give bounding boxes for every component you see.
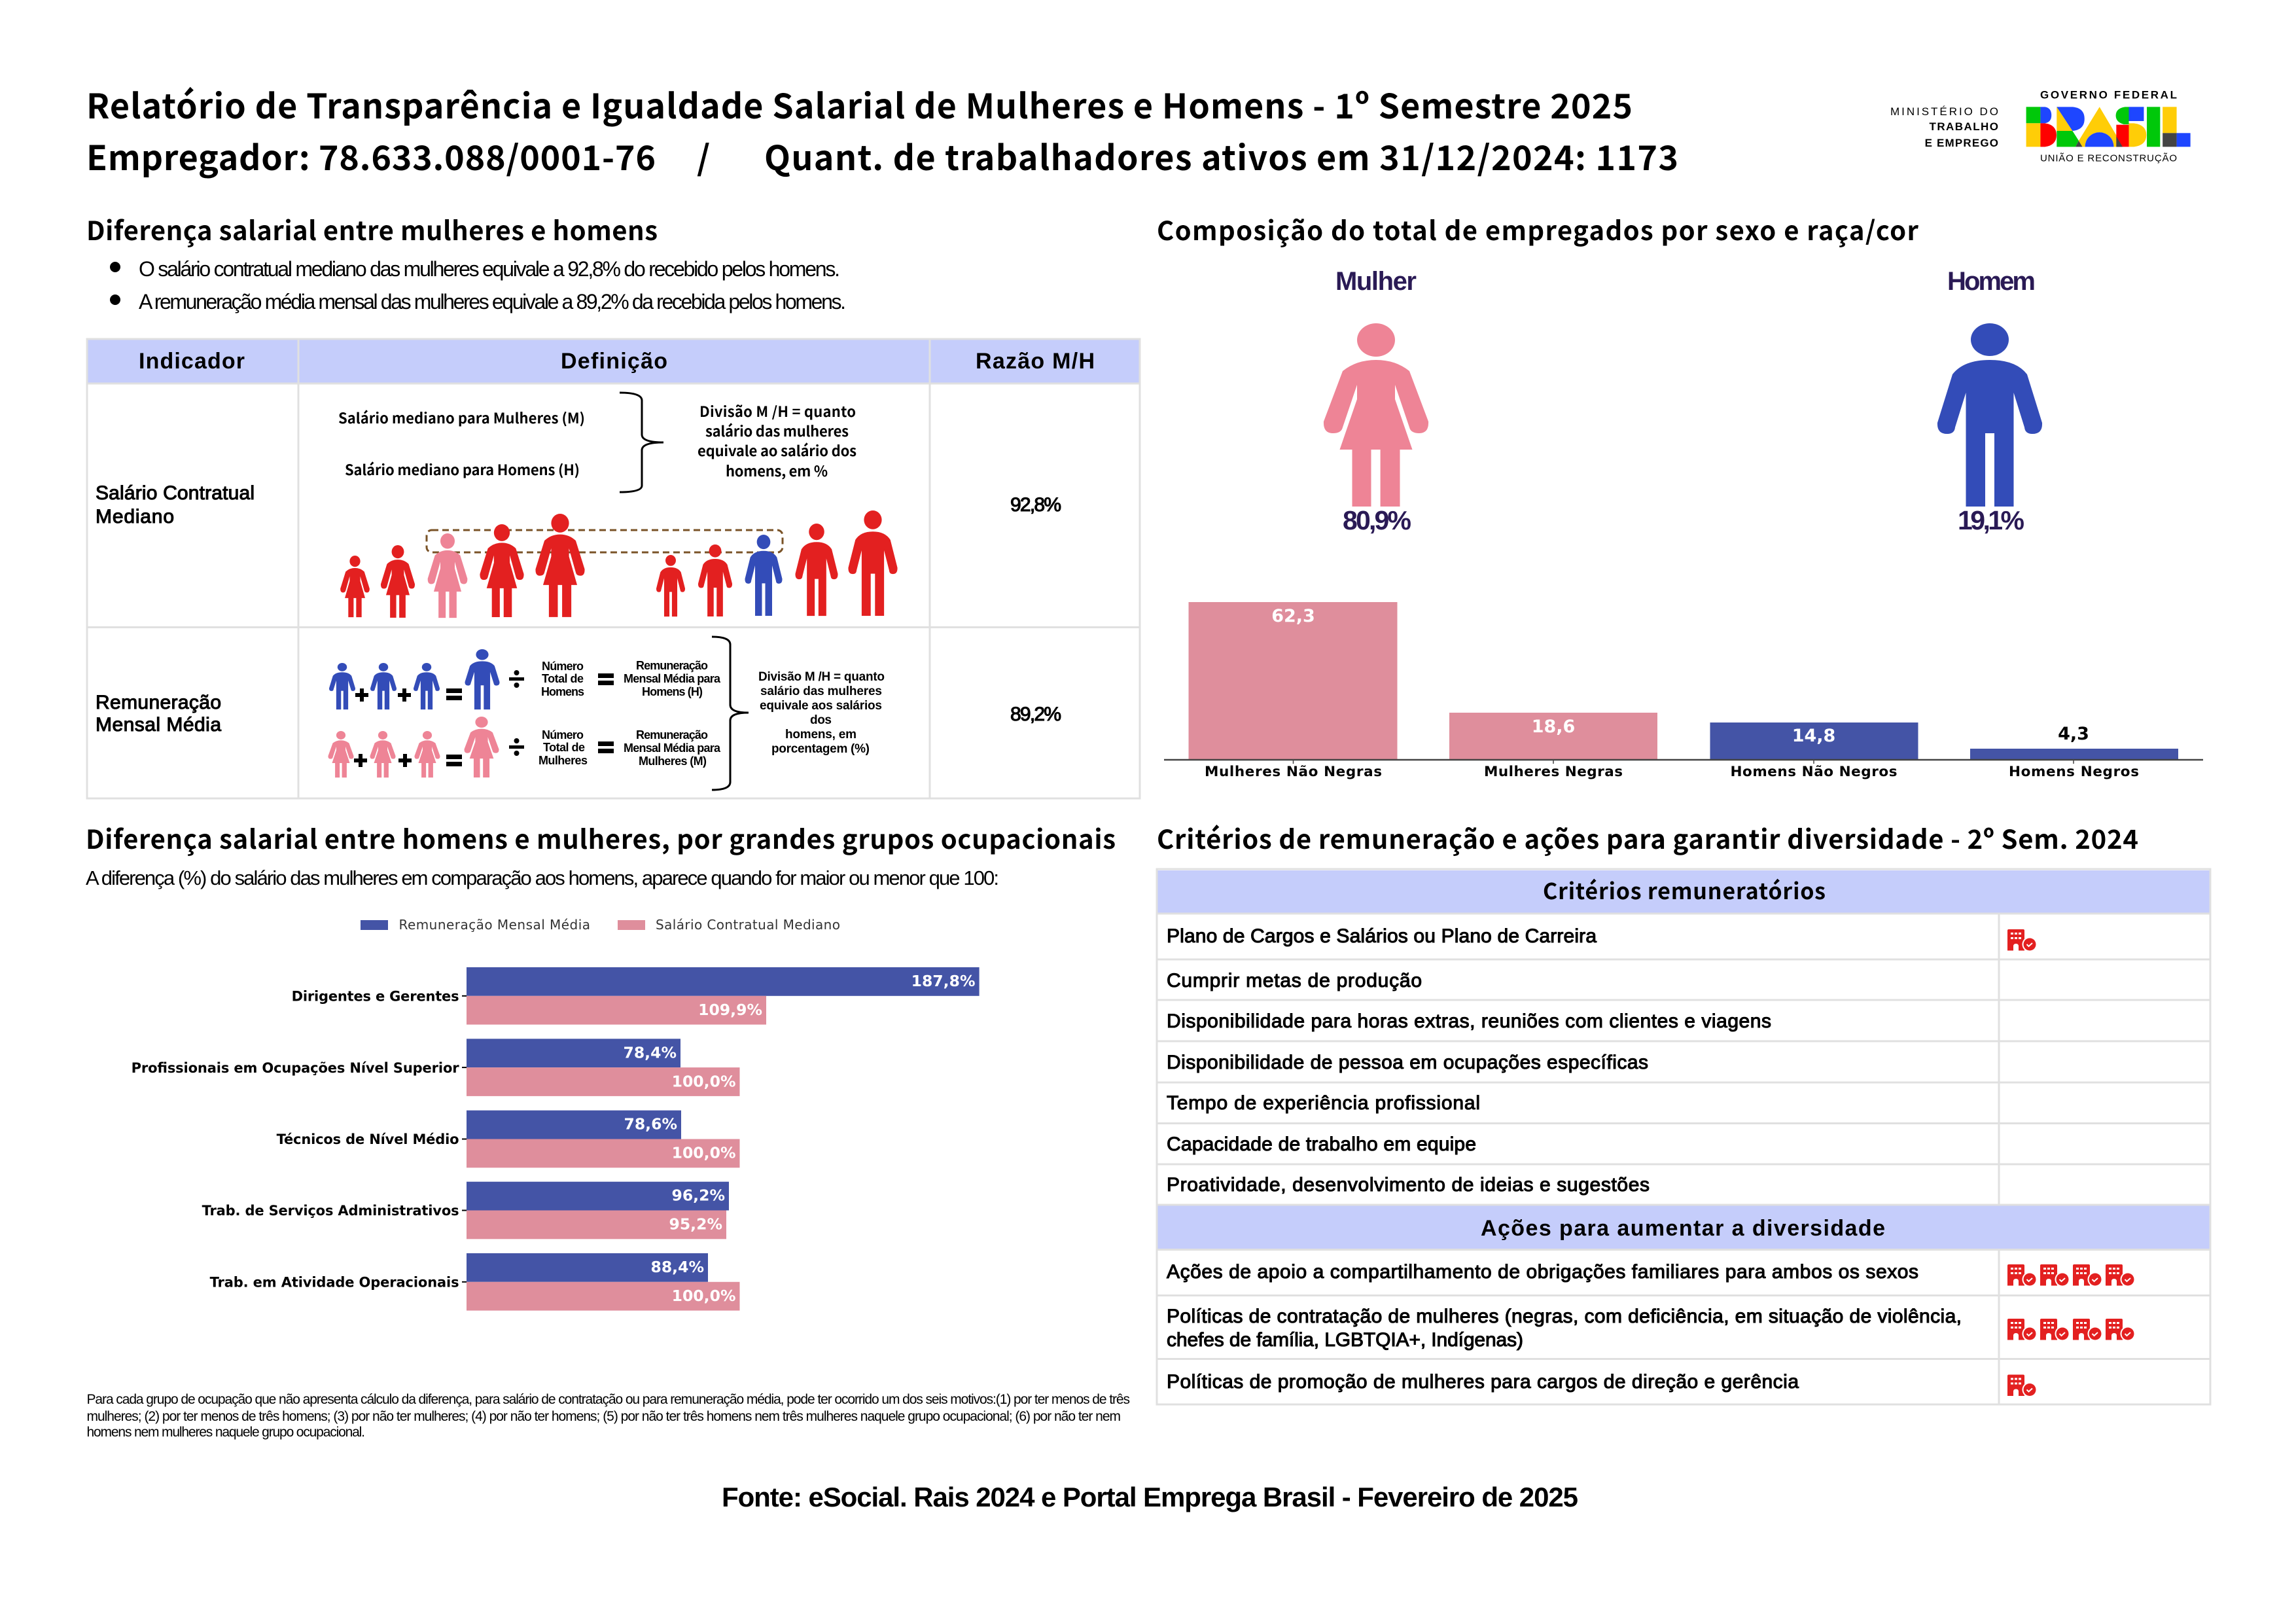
definition: salário mediano: equivale ao salário dos <box>698 440 857 461</box>
bar chart: grupos ocupacionais <box>132 967 980 1311</box>
panel: composição mulher: Mulher <box>1335 267 1417 296</box>
definition: remuneração média mulheres: Mulheres <box>539 754 588 767</box>
title: Quant. de trabalhadores ativos em 31/12/2024: 1173 <box>764 131 1678 180</box>
table header: Razão M/H <box>976 349 1095 374</box>
list: ações <box>1167 1261 1962 1393</box>
panel: composição mulher <box>1324 267 1428 535</box>
panel: composição homem: Homem <box>1947 267 2036 296</box>
icons: fila de pessoas com mediana <box>340 510 898 618</box>
footnote <box>86 1392 1130 1440</box>
list: ações: Ações de apoio a compartilhamento de obrigações familiares para ambos os sexos <box>1167 1261 1918 1283</box>
callout: divisão M/H: dos <box>810 713 832 727</box>
group: profissionais: 78,4% <box>623 1043 677 1061</box>
group: dirigentes: 109,9% <box>698 1001 762 1019</box>
header: critérios remuneratórios: Critérios remuneratórios <box>1543 874 1826 906</box>
row label: salário contratual mediano: Mediano <box>96 506 174 527</box>
bar chart: sexo e raça: 62,3 <box>1271 606 1315 626</box>
bullet list <box>110 257 846 313</box>
heading: composição: Composição do total de empregados por sexo e raça/cor <box>1157 210 1919 248</box>
group: técnicos: 100,0% <box>672 1144 735 1162</box>
legend: Remuneração Mensal Média <box>399 917 590 933</box>
panel: composição homem: 19,1% <box>1958 505 2024 535</box>
definition: remuneração média homens: Homens <box>541 685 584 698</box>
definition: remuneração média homens: Mensal Média para <box>624 672 721 685</box>
row label: remuneração mensal média <box>96 692 221 736</box>
group: técnicos <box>277 1111 740 1168</box>
definition: remuneração média homens: Total de <box>542 672 584 685</box>
text: explicação do gráfico: A diferença (%) do salário das mulheres em comparação aos homens, aparece quando for maior ou menor que 100: <box>86 866 999 889</box>
icons: empresas <box>2007 929 2136 1397</box>
definition: salário mediano: Salário mediano para Mulheres (M) <box>338 407 585 428</box>
definition: remuneração média mulheres: Mulheres (M) <box>639 755 707 768</box>
table header: Definição <box>561 349 667 374</box>
legend: Salário Contratual Mediano <box>656 917 840 933</box>
bar chart: sexo e raça: 4,3 <box>2058 724 2089 744</box>
definition: salário mediano: Divisão M /H = quanto <box>699 401 856 421</box>
table header: Indicador <box>139 349 245 374</box>
definition: salário mediano <box>338 393 857 492</box>
group: profissionais: Profissionais em Ocupações Nível Superior <box>132 1060 459 1076</box>
definition: remuneração média mulheres: Remuneração <box>636 728 708 741</box>
group: dirigentes <box>292 967 980 1025</box>
group: dirigentes: Dirigentes e Gerentes <box>292 988 459 1004</box>
title: / <box>697 131 710 180</box>
logo: ministério e governo federal: E EMPREGO <box>1925 137 1998 149</box>
list: ações: Políticas de promoção de mulheres para cargos de direção e gerência <box>1167 1371 1799 1393</box>
group: profissionais: 100,0% <box>672 1072 735 1090</box>
bar chart: sexo e raça: Mulheres Não Negras <box>1205 764 1382 780</box>
logo: ministério e governo federal: MINISTÉRIO DO <box>1890 105 1998 118</box>
definition: remuneração média homens <box>329 649 721 709</box>
callout: divisão M/H: salário das mulheres <box>760 685 882 698</box>
bar chart: sexo e raça: 14,8 <box>1792 726 1835 746</box>
definition: remuneração média mulheres: Total de <box>543 741 585 754</box>
title <box>86 79 1678 180</box>
group: serviços administrativos: Trab. de Serviços Administrativos <box>202 1203 459 1219</box>
panel: composição homem <box>1937 267 2042 535</box>
bullet list: O salário contratual mediano das mulheres equivale a 92,8% do recebido pelos homens. <box>139 257 840 281</box>
definition: remuneração média mulheres <box>328 717 721 777</box>
panel: composição mulher: 80,9% <box>1343 505 1411 535</box>
table header <box>87 340 1140 383</box>
footnote: Para cada grupo de ocupação que não apresenta cálculo da diferença, para salário de contratação ou para remuneração média, pode ter ocorrido um dos seis motivos:(1) por ter menos de três <box>86 1392 1130 1407</box>
group: atividade operacional: 100,0% <box>672 1287 735 1305</box>
group: serviços administrativos: 96,2% <box>671 1186 725 1205</box>
group: serviços administrativos <box>202 1182 729 1239</box>
definition: salário mediano: salário das mulheres <box>705 420 849 441</box>
legend <box>361 917 840 933</box>
group: serviços administrativos: 95,2% <box>669 1215 722 1234</box>
panel: critérios e ações <box>1157 869 2210 1404</box>
heading: diferença por grupos ocupacionais: Diferença salarial entre homens e mulheres, por grandes grupos ocupacionais <box>86 819 1116 857</box>
callout: divisão M/H: equivale aos salários <box>760 699 882 713</box>
logo: ministério e governo federal <box>1890 89 2191 164</box>
heading: critérios: Critérios de remuneração e ações para garantir diversidade - 2º Sem. 2024 <box>1157 819 2138 857</box>
list: ações: chefes de família, LGBTQIA+, Indígenas) <box>1167 1329 1523 1351</box>
bullet list: A remuneração média mensal das mulheres equivale a 89,2% da recebida pelos homens. <box>139 290 846 313</box>
footnote: mulheres; (2) por ter menos de três homens; (3) por não ter mulheres; (4) por não ter homens; (5) por não ter três homens nem três mulheres naquele grupo ocupacional; (6) por não ter nem <box>86 1409 1121 1424</box>
bar chart: sexo e raça: Mulheres Negras <box>1484 764 1623 780</box>
definition: salário mediano: homens, em % <box>726 460 828 481</box>
bar chart: sexo e raça <box>1164 602 2203 780</box>
row label: salário contratual mediano: Salário Contratual <box>96 482 255 504</box>
title: Relatório de Transparência e Igualdade Salarial de Mulheres e Homens - 1º Semestre 2025 <box>86 79 1633 128</box>
list: critérios: Cumprir metas de produção <box>1167 970 1422 991</box>
bar chart: sexo e raça: 18,6 <box>1532 717 1575 737</box>
list: critérios: Proatividade, desenvolvimento de ideias e sugestões <box>1167 1174 1650 1196</box>
list: critérios: Capacidade de trabalho em equipe <box>1167 1133 1476 1155</box>
value: razão remuneração: 89,2% <box>1010 704 1061 725</box>
list: ações: Políticas de contratação de mulheres (negras, com deficiência, em situação de violência, <box>1167 1306 1962 1327</box>
row label: remuneração mensal média: Remuneração <box>96 692 221 713</box>
group: atividade operacional: Trab. em Atividade Operacionais <box>210 1275 459 1291</box>
group: profissionais <box>132 1039 740 1096</box>
logo: ministério e governo federal: GOVERNO FEDERAL <box>2040 89 2177 101</box>
definition: remuneração média homens: Homens (H) <box>642 685 703 698</box>
group: atividade operacional: 88,4% <box>650 1258 704 1276</box>
group: dirigentes: 187,8% <box>911 972 975 990</box>
title: Empregador: 78.633.088/0001-76 <box>86 131 656 180</box>
definition: remuneração média mulheres: Mensal Média para <box>624 741 721 755</box>
list: critérios: Plano de Cargos e Salários ou Plano de Carreira <box>1167 925 1597 947</box>
group: atividade operacional <box>210 1253 740 1311</box>
header: ações para aumentar a diversidade: Ações para aumentar a diversidade <box>1481 1216 1885 1241</box>
row label: salário contratual mediano <box>96 482 255 527</box>
heading: diferença salarial: Diferença salarial entre mulheres e homens <box>86 210 658 248</box>
source: Fonte: eSocial. Rais 2024 e Portal Emprega Brasil - Fevereiro de 2025 <box>722 1482 1578 1512</box>
list: critérios <box>1167 925 1771 1196</box>
list: critérios: Disponibilidade de pessoa em ocupações específicas <box>1167 1052 1648 1073</box>
callout: divisão M/H <box>712 637 885 790</box>
list: critérios: Disponibilidade para horas extras, reuniões com clientes e viagens <box>1167 1010 1771 1032</box>
definition: salário mediano: Salário mediano para Homens (H) <box>345 459 580 480</box>
bar chart: sexo e raça: Homens Negros <box>2009 764 2139 780</box>
footnote: homens nem mulheres naquele grupo ocupacional. <box>86 1425 365 1440</box>
logo: ministério e governo federal: UNIÃO E RECONSTRUÇÃO <box>2040 153 2177 164</box>
definition: remuneração média homens: Número <box>542 660 584 673</box>
group: técnicos: Técnicos de Nível Médio <box>277 1132 459 1147</box>
list: critérios: Tempo de experiência profissional <box>1167 1092 1480 1114</box>
logo: ministério e governo federal: TRABALHO <box>1929 120 1998 133</box>
callout: divisão M/H: Divisão M /H = quanto <box>758 670 885 684</box>
callout: divisão M/H: porcentagem (%) <box>771 742 870 756</box>
row label: remuneração mensal média: Mensal Média <box>96 714 221 736</box>
definition: remuneração média mulheres: Número <box>542 728 584 741</box>
panel: tabela de indicadores <box>87 339 1140 798</box>
callout: divisão M/H: homens, em <box>785 728 857 741</box>
value: razão salário: 92,8% <box>1010 494 1061 516</box>
group: técnicos: 78,6% <box>624 1115 677 1133</box>
bar chart: sexo e raça: Homens Não Negros <box>1730 764 1898 780</box>
definition: remuneração média homens: Remuneração <box>636 659 708 672</box>
